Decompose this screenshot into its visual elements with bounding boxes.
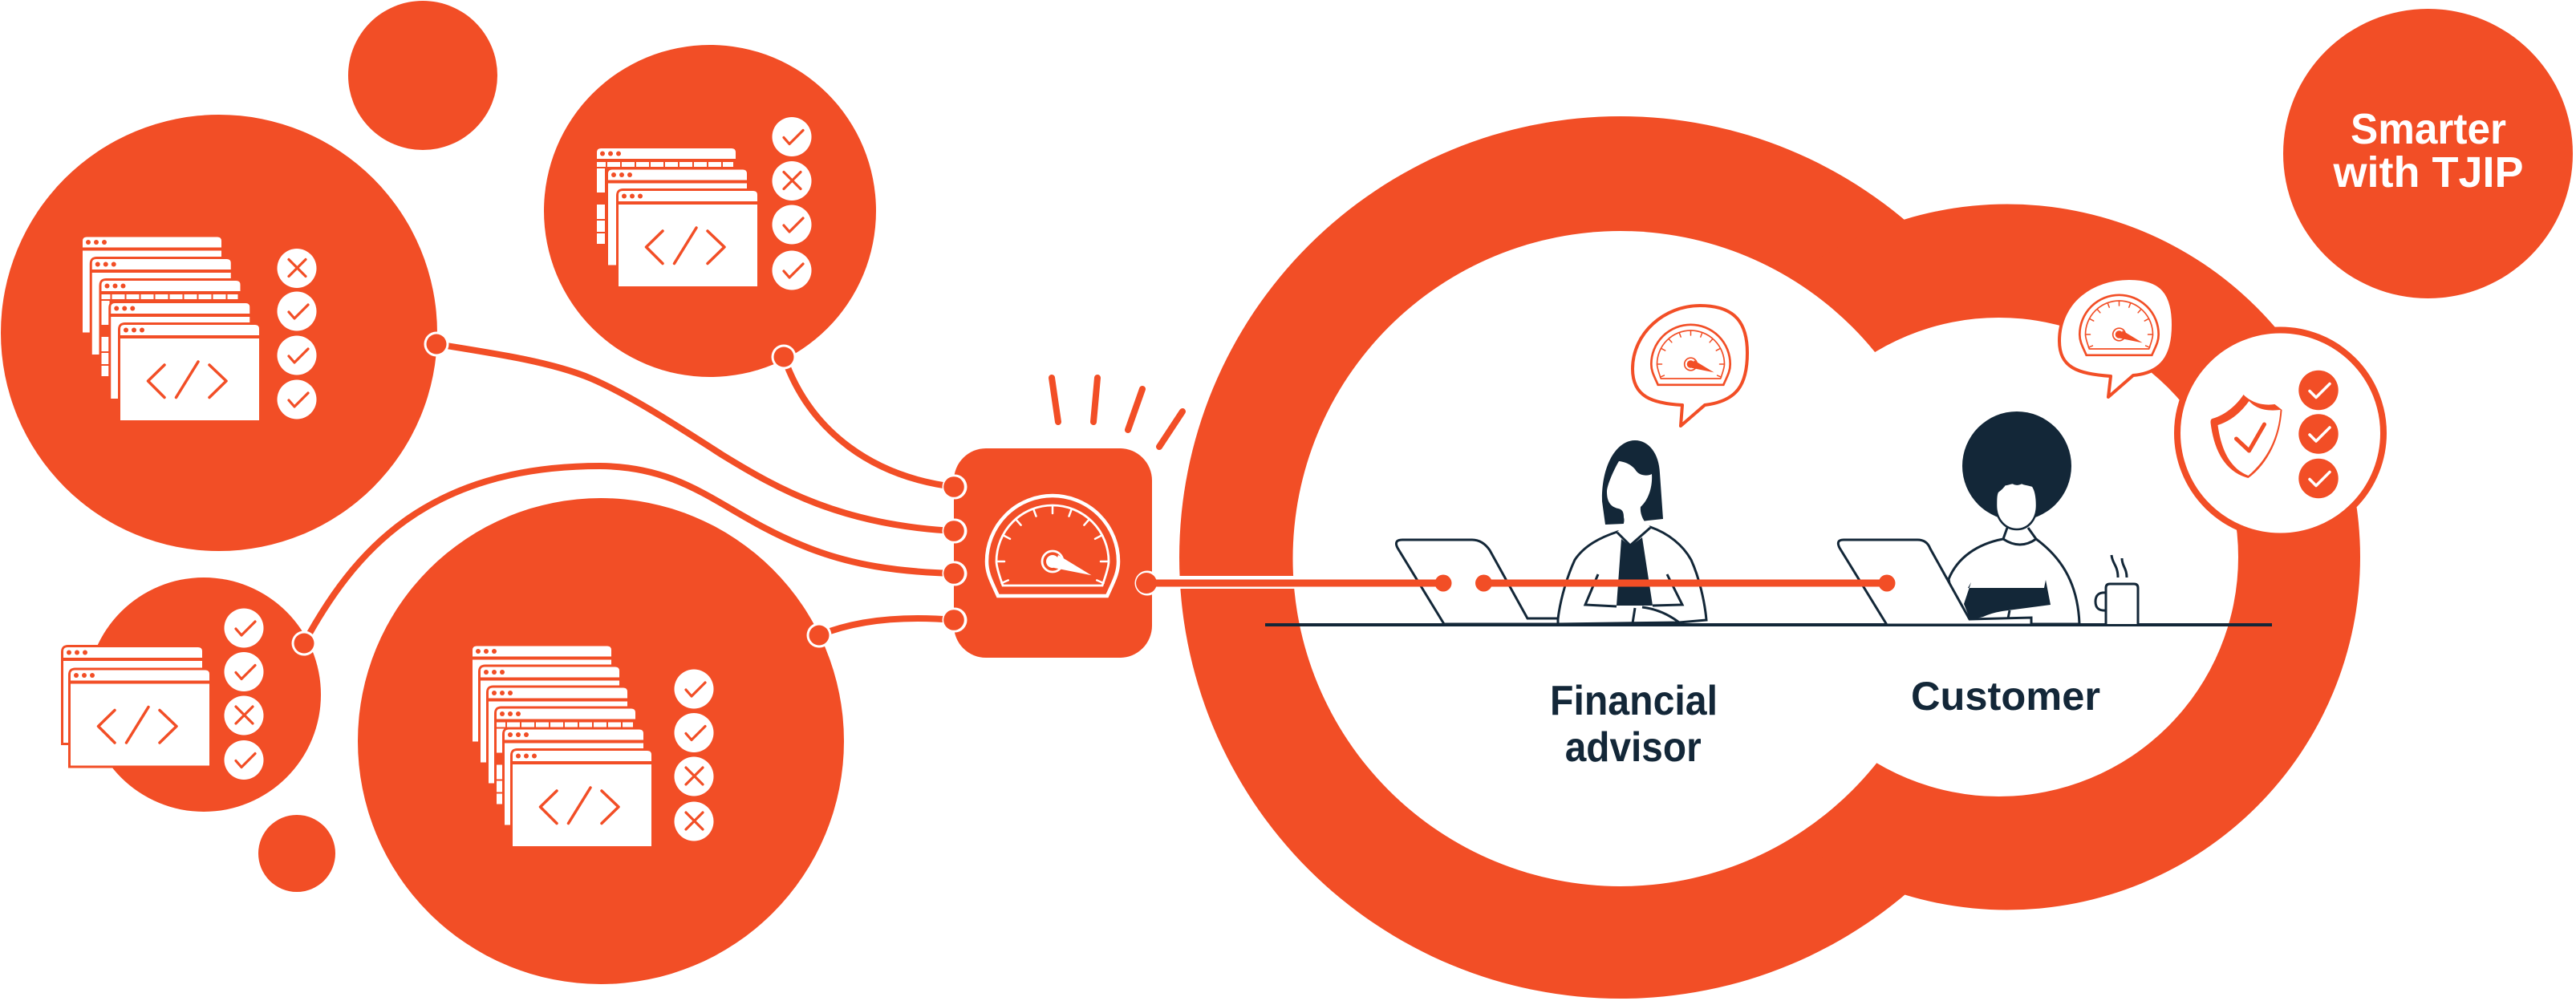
panel: large cloud ring bbox=[1179, 116, 2360, 999]
connector ports on system circles bbox=[292, 332, 831, 656]
icon: stacked code windows bbox=[594, 146, 757, 289]
panel: central gauge hub bbox=[942, 448, 1152, 658]
signal rays above hub bbox=[1052, 378, 1183, 447]
label: customer: Customer bbox=[1911, 674, 2100, 719]
collar bbox=[1617, 528, 1650, 545]
callout text second line: with TJIP bbox=[2333, 148, 2524, 197]
speech bubble: advisor gauge bbox=[1633, 306, 1747, 426]
label: financial advisor: Financial bbox=[1550, 678, 1718, 724]
face bbox=[1996, 483, 2037, 529]
icon: shield bbox=[2211, 395, 2282, 478]
dark top bbox=[1964, 580, 2051, 620]
illustration: financial advisor bbox=[1558, 440, 1706, 624]
dark top bbox=[1617, 537, 1653, 606]
desk line bbox=[1265, 623, 2272, 626]
icon: stacked code windows bbox=[470, 643, 651, 849]
decorative dot: top bbox=[348, 1, 497, 150]
hub ports bbox=[942, 475, 968, 632]
stem bbox=[2008, 610, 2010, 618]
status icons bbox=[278, 249, 316, 419]
icon: stacked code windows bbox=[80, 234, 259, 423]
body bbox=[1558, 527, 1706, 624]
body bbox=[1949, 539, 2079, 624]
icon: stacked code windows bbox=[61, 645, 209, 768]
panel: security shield circle bbox=[2177, 330, 2383, 536]
label: financial advisor second line: advisor bbox=[1565, 724, 1702, 771]
hair bbox=[1602, 440, 1663, 525]
panel: system circle left with five windows bbox=[1, 115, 437, 551]
icon: speedometer bbox=[987, 496, 1118, 596]
speech bubble: customer gauge bbox=[2059, 278, 2173, 397]
icon: coffee mug bbox=[2095, 555, 2138, 624]
connection line from hub to advisor bbox=[1134, 571, 1452, 595]
callout text: Smarter bbox=[2351, 105, 2506, 153]
illustration: customer bbox=[1838, 411, 2079, 625]
status icons bbox=[674, 669, 714, 841]
laptop bbox=[1838, 540, 2031, 625]
panel: system circle top with three windows bbox=[544, 45, 876, 377]
panel: system circle bottom with six windows bbox=[358, 498, 844, 984]
status icons bbox=[2298, 371, 2339, 498]
callout: smarter with TJIP bbox=[2283, 9, 2573, 298]
arms bbox=[1585, 574, 1682, 623]
afro hair bbox=[1962, 411, 2071, 521]
status icons bbox=[772, 117, 812, 290]
face bbox=[1607, 461, 1652, 545]
connector lines to hub bbox=[304, 344, 955, 643]
status icons bbox=[225, 608, 263, 780]
connection line from advisor to customer bbox=[1475, 574, 1895, 592]
illustration: financial advisor laptop bbox=[1396, 540, 1588, 624]
decorative dot: bottom bbox=[258, 815, 335, 892]
panel: system circle bottom left with two windows bbox=[61, 578, 321, 812]
neck bbox=[2003, 528, 2036, 539]
white gap around connection line bbox=[1155, 576, 1300, 589]
